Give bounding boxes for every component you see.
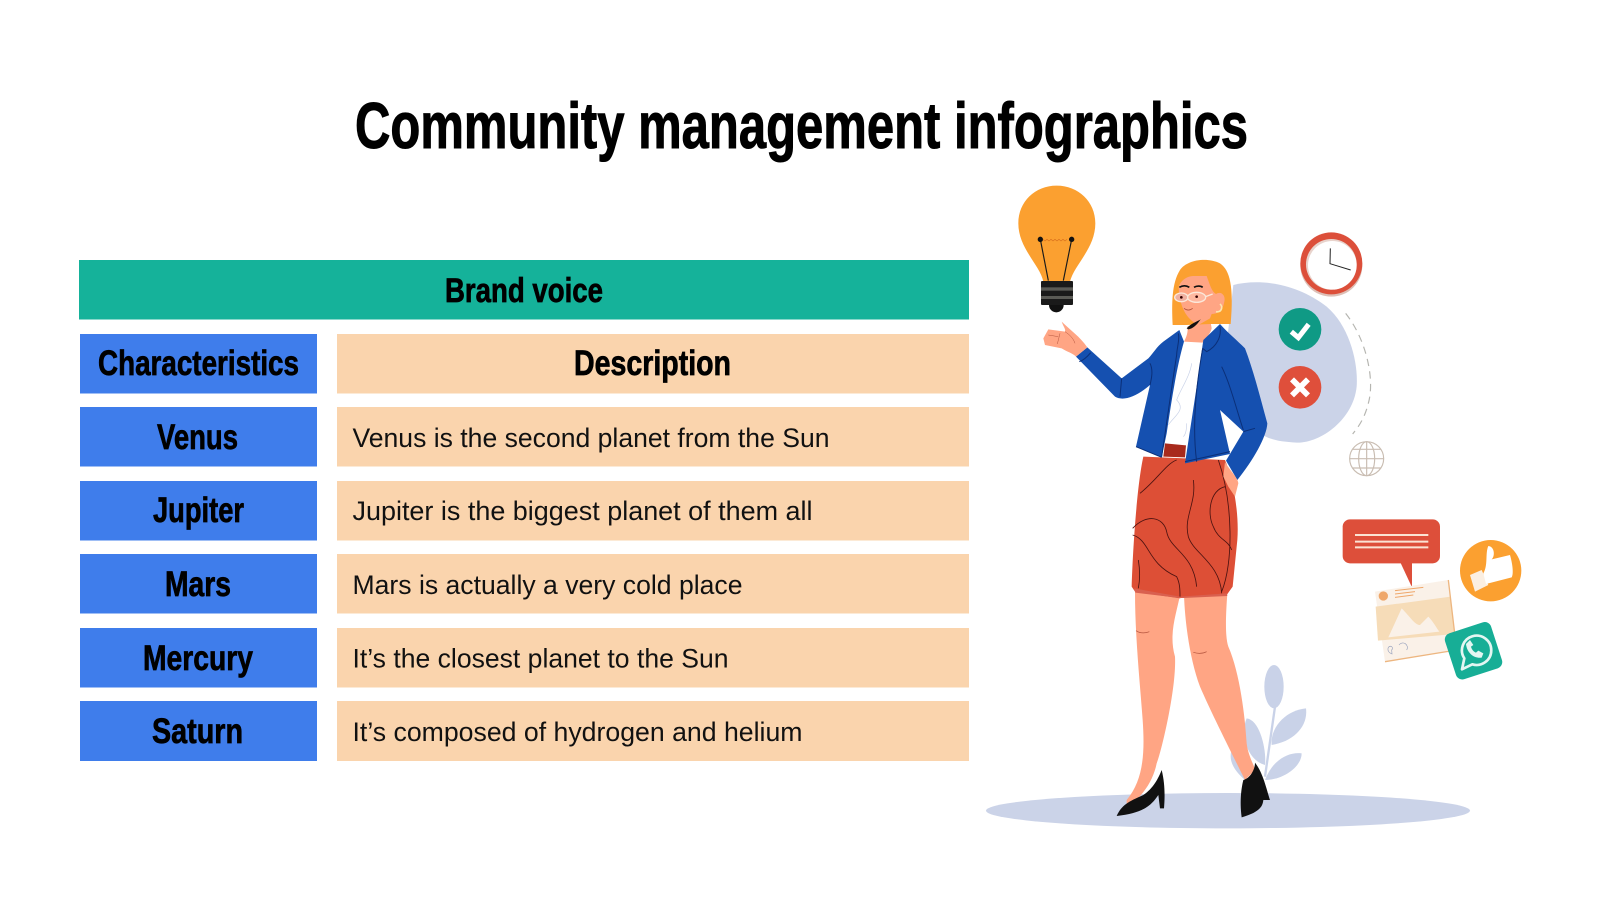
- row: Jupiter: [80, 481, 969, 540]
- panel: brand voice table: [79, 260, 969, 761]
- row: Saturn: [80, 701, 969, 761]
- illustration: woman presenting with community icons: [986, 186, 1521, 828]
- icon: whatsapp: [1443, 620, 1504, 681]
- column header: characteristics: Characteristics: [98, 344, 299, 383]
- icon: cross: [1279, 366, 1321, 409]
- column header: description: [337, 334, 969, 394]
- row: Mercury: [80, 628, 969, 688]
- row: Venus: Venus is the second planet from the Sun: [352, 423, 830, 453]
- column header: description: Description: [574, 344, 731, 383]
- hands: [1043, 322, 1087, 357]
- woman: [1043, 260, 1270, 817]
- title: Community management infographics: [355, 89, 1248, 162]
- row: Mars: Mars is actually a very cold place: [352, 570, 742, 600]
- face: [1179, 276, 1225, 325]
- table header: brand voice: [79, 260, 969, 320]
- icon: check: [1279, 308, 1321, 351]
- row: Jupiter: Jupiter: [153, 491, 244, 530]
- row: Venus: [80, 407, 969, 466]
- row: Mercury: Mercury: [143, 639, 253, 678]
- icon: globe: [1350, 442, 1384, 476]
- row: Venus: Venus: [157, 418, 238, 457]
- plant: [1231, 665, 1306, 780]
- shirt: [1165, 342, 1203, 445]
- shoes: [1117, 770, 1165, 816]
- icon: speech bubble: [1343, 519, 1440, 587]
- icon: thumbs up: [1460, 540, 1521, 601]
- ground shadow: [986, 793, 1470, 828]
- row: Mars: Mars: [165, 565, 231, 604]
- glasses and features: [1179, 286, 1203, 287]
- skirt: [1132, 457, 1238, 598]
- legs: [1127, 592, 1180, 807]
- dashed arc: [1346, 313, 1371, 434]
- table header: brand voice: Brand voice: [445, 272, 603, 310]
- row: Mercury: It’s the closest planet to the Sun: [352, 644, 728, 674]
- row: Saturn: It’s composed of hydrogen and helium: [352, 717, 802, 747]
- icon: clock: [1300, 232, 1362, 297]
- background blob: [1220, 282, 1357, 443]
- belt: [1163, 443, 1186, 457]
- jacket: [1076, 330, 1184, 457]
- row: Jupiter: Jupiter is the biggest planet of them all: [352, 496, 812, 526]
- icon: light bulb: [1018, 186, 1095, 312]
- icon: social post card: [1375, 580, 1457, 662]
- neck: [1184, 318, 1212, 343]
- hair: [1172, 260, 1232, 325]
- column header: characteristics: [80, 334, 317, 394]
- row: Saturn: Saturn: [152, 712, 243, 751]
- row: Mars: [80, 554, 969, 614]
